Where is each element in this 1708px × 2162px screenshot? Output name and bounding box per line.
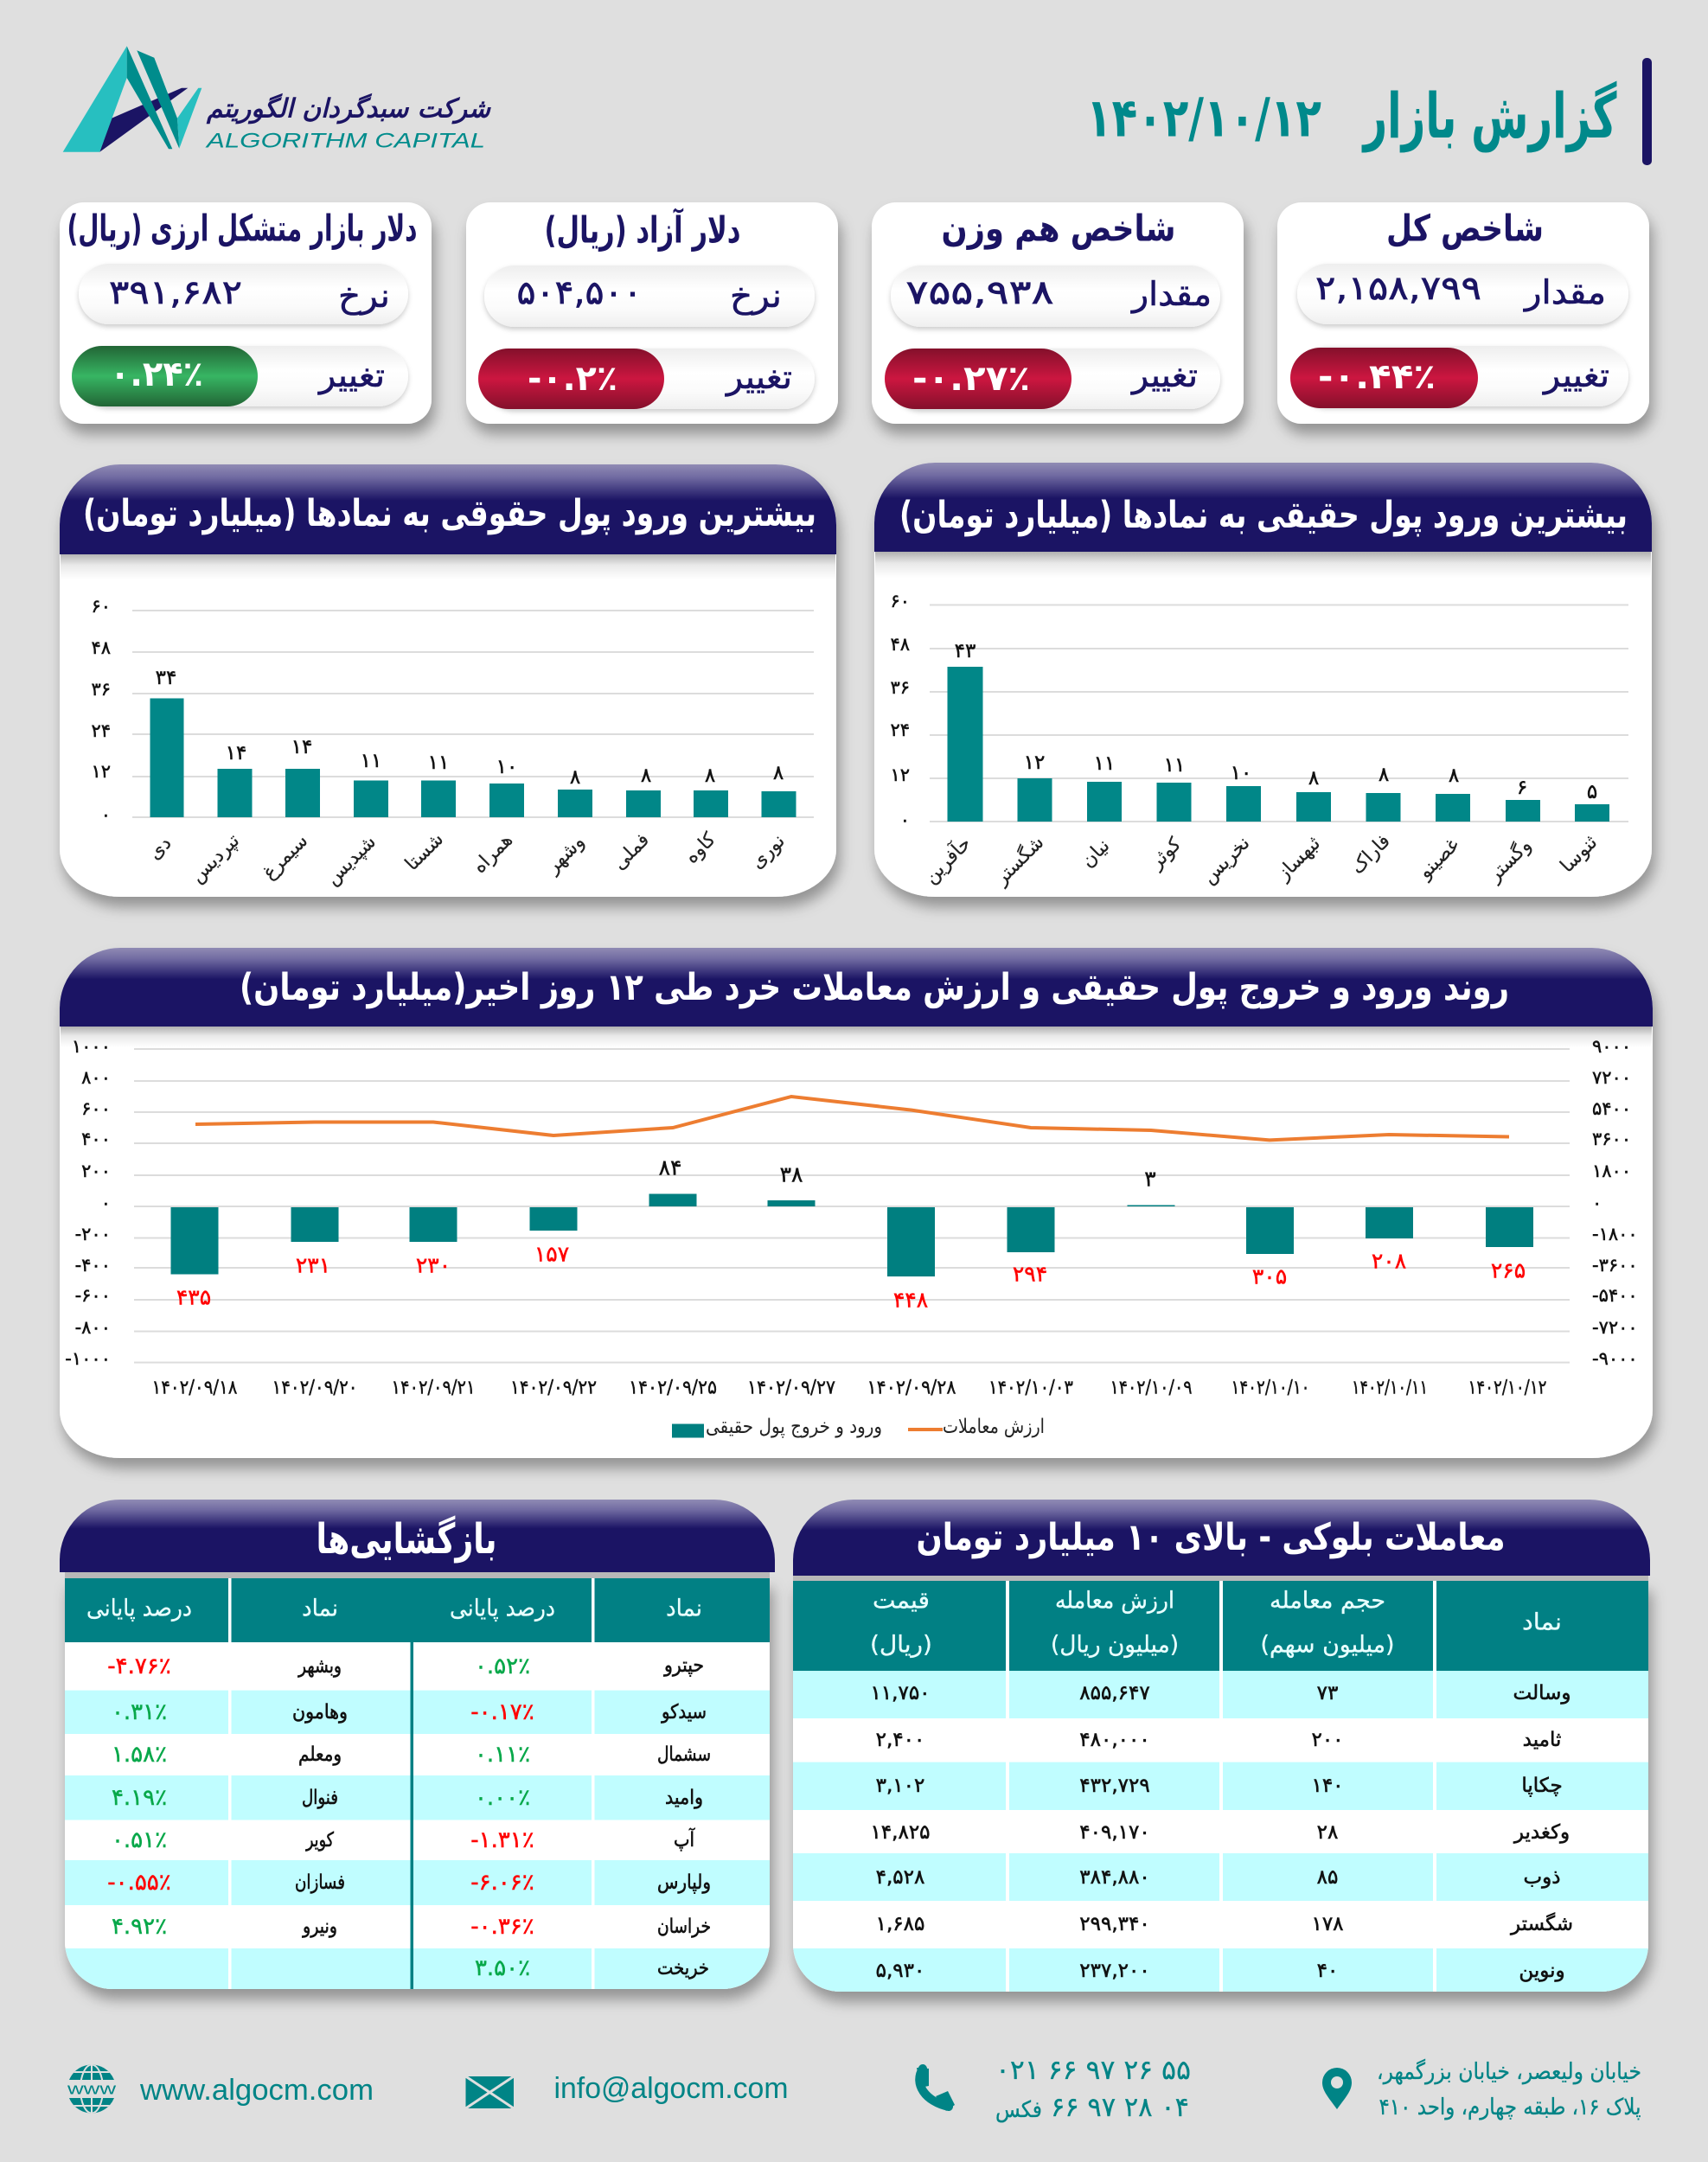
chart legend: ارزش معاملات	[943, 1416, 1045, 1438]
block trades table: ۴۰۹,۱۷۰	[1079, 1821, 1150, 1844]
combo chart: ۱۴۰۲/۰۹/۲۵	[629, 1377, 717, 1399]
block trades table: ذوب	[1523, 1866, 1561, 1889]
bar chart: ۱۲	[91, 761, 111, 782]
opening table: درصد پایانی	[450, 1595, 555, 1622]
bar chart: دی	[144, 833, 176, 864]
block trades table: ۱۱,۷۵۰	[870, 1682, 931, 1705]
card heading: دلار بازار متشکل ارزی (ریال)	[67, 208, 417, 249]
bar chart: ۶۰	[890, 591, 910, 611]
value label: نرخ	[730, 277, 782, 316]
value: ۲,۱۵۸,۷۹۹	[1315, 269, 1481, 307]
panel header	[60, 1500, 775, 1572]
change value: ۰.۲۴٪	[110, 355, 203, 394]
combo chart: ۲۰۸	[1372, 1249, 1406, 1273]
combo chart: -۳۶۰۰	[1592, 1255, 1638, 1276]
bar chart: شپدیس	[322, 831, 381, 890]
panel heading: روند ورود و خروج پول حقیقی و ارزش معاملات خرد طی ۱۲ روز اخیر(میلیارد تومان)	[240, 966, 1509, 1009]
block trades table: ۵,۹۳۰	[876, 1960, 924, 1982]
bar chart: نوری	[746, 830, 790, 873]
block trades table: شگستر	[1510, 1912, 1573, 1935]
change label: تغییر	[1130, 356, 1198, 395]
opening table: سیدکو	[661, 1701, 707, 1724]
value pill	[484, 265, 815, 327]
bar chart: ۸	[1308, 767, 1319, 790]
icon: envelope	[465, 2076, 514, 2108]
bar chart: ۶	[1517, 777, 1527, 799]
combo chart: ۱۴۰۲/۱۰/۰۹	[1110, 1377, 1192, 1399]
block trades table: (میلیون ریال)	[1051, 1631, 1179, 1659]
opening table: ۱.۵۸٪	[112, 1742, 167, 1768]
bar chart: حآفرین	[918, 831, 976, 888]
change badge	[1290, 348, 1478, 408]
bar chart: سیمرغ	[259, 830, 312, 884]
bar chart: تپردیس	[187, 830, 244, 887]
footer contact	[66, 2055, 1641, 2123]
block trades table: ۲۸	[1317, 1821, 1338, 1844]
block trades table: ۱,۶۸۵	[876, 1913, 924, 1935]
opening table: ۰.۵۲٪	[475, 1653, 530, 1679]
block trades table: ۱۷۸	[1311, 1913, 1344, 1935]
opening table: -۶.۰۶٪	[470, 1870, 534, 1896]
bar chart: ۳۶	[91, 679, 111, 700]
panel background	[60, 464, 836, 897]
combo chart: -۴۰۰	[75, 1255, 111, 1276]
opening table: ۰.۵۱٪	[112, 1827, 167, 1853]
address: خیابان ولیعصر، خیابان بزرگمهر،	[1377, 2058, 1641, 2085]
bar chart: شستا	[401, 828, 448, 875]
card heading: شاخص هم وزن	[941, 208, 1176, 251]
opening table: ۳.۵۰٪	[475, 1955, 530, 1981]
card heading: دلار آزاد (ریال)	[545, 208, 740, 251]
combo chart: -۷۲۰۰	[1592, 1317, 1638, 1338]
change pill	[1297, 346, 1628, 406]
icon: globe: www	[67, 2081, 117, 2098]
combo chart: ۸۴	[659, 1155, 681, 1180]
change label: تغییر	[1542, 356, 1609, 395]
bar chart: ۵	[1587, 781, 1597, 803]
change pill	[484, 349, 815, 409]
block trades table: ۳,۱۰۲	[876, 1775, 924, 1797]
bar chart: ۱۲	[1024, 752, 1045, 774]
bar chart: نخریس	[1199, 833, 1254, 888]
card background	[872, 202, 1244, 424]
bar chart: غصینو	[1414, 835, 1463, 884]
opening table: -۴.۷۶٪	[107, 1653, 171, 1679]
block trades table	[793, 1581, 1648, 1992]
phone number: ۰۲۱ ۶۶ ۹۷ ۲۶ ۵۵	[995, 2055, 1191, 2086]
combo chart: ۹۰۰۰	[1592, 1036, 1631, 1057]
block trades table: حجم معامله	[1270, 1588, 1385, 1614]
bar chart: ۱۱	[1164, 754, 1185, 777]
opening table: ۴.۹۲٪	[112, 1914, 167, 1940]
combo chart: ۱۴۰۲/۰۹/۱۸	[152, 1377, 238, 1399]
opening table: حپترو	[663, 1654, 704, 1677]
opening table: نماد	[302, 1595, 338, 1622]
bar chart: ۸	[705, 764, 715, 787]
bar chart: ثنوسا	[1557, 832, 1602, 877]
bar chart: ۸	[1379, 764, 1389, 786]
combo chart: ۸۰۰	[81, 1067, 111, 1088]
card: free dollar	[466, 202, 838, 424]
block trades table: ۱۴۰	[1311, 1775, 1344, 1797]
opening table: ونیرو	[302, 1916, 337, 1938]
bar chart: ۱۲	[890, 764, 910, 785]
fax number: ۶۶ ۹۷ ۲۸ ۰۴	[1051, 2092, 1189, 2123]
bar chart: شگستر	[989, 831, 1048, 890]
card: total index	[1277, 202, 1649, 424]
block trades table: ۷۳	[1317, 1682, 1338, 1705]
combo chart: ۱۵۷	[534, 1242, 569, 1266]
bar chart: ۸	[570, 766, 580, 789]
combo chart: ۳۸	[780, 1162, 803, 1187]
value pill	[891, 265, 1220, 327]
bar chart: ۱۱	[428, 752, 449, 774]
combo chart: ۱۴۰۲/۰۹/۲۸	[867, 1377, 956, 1399]
value: ۷۵۵,۹۳۸	[906, 273, 1053, 311]
bar chart: ۸	[1449, 764, 1459, 787]
panel heading: معاملات بلوکی - بالای ۱۰ میلیارد تومان	[917, 1516, 1505, 1559]
bar chart: ۳۶	[890, 677, 910, 698]
combo chart: -۵۴۰۰	[1592, 1285, 1638, 1306]
bar chart: ۱۱	[361, 750, 381, 772]
combo chart: -۱۰۰۰	[65, 1348, 111, 1369]
card heading: شاخص کل	[1386, 208, 1544, 251]
bar chart: کاوه	[681, 828, 720, 868]
combo chart: ۱۴۰۲/۰۹/۲۱	[391, 1377, 476, 1399]
combo chart: -۸۰۰	[75, 1317, 111, 1338]
bar chart: فملی	[609, 829, 654, 874]
header shadow	[875, 552, 1651, 578]
change value: -۰.۴۴٪	[1318, 357, 1436, 397]
combo chart: ۴۳۵	[176, 1285, 211, 1309]
block trades table: (میلیون سهم)	[1261, 1631, 1394, 1659]
combo chart: -۶۰۰	[75, 1285, 111, 1306]
bar chart: ۱۴	[291, 736, 312, 758]
bar chart: ۲۴	[91, 720, 111, 741]
combo chart: ۳	[1144, 1166, 1156, 1192]
block trades table: ۴۳۲,۷۲۹	[1079, 1775, 1150, 1797]
card background	[60, 202, 432, 424]
value label: مقدار	[1130, 275, 1212, 313]
address: پلاک ۱۶، طبقه چهارم، واحد ۴۱۰	[1379, 2095, 1641, 2120]
logo text persian: شرکت سبدگردان الگوریتم	[206, 93, 492, 125]
change pill	[79, 346, 408, 406]
address	[1377, 2058, 1641, 2120]
value: ۵۰۴,۵۰۰	[517, 273, 642, 311]
chart legend	[672, 1416, 1045, 1438]
card background	[466, 202, 838, 424]
combo chart: ۲۳۱	[296, 1252, 330, 1278]
combo chart: ۰	[101, 1193, 111, 1213]
bar chart: همراه	[469, 829, 517, 878]
opening table: ۰.۰۰٪	[475, 1785, 530, 1811]
table background	[65, 1578, 770, 1989]
block trades table: ۲۰۰	[1311, 1729, 1344, 1751]
opening table: نماد	[666, 1595, 702, 1622]
bar chart: ۶۰	[91, 596, 111, 617]
block trades table: چکاپا	[1521, 1775, 1563, 1797]
logo mark	[63, 46, 202, 152]
block trades table: ۴,۵۲۸	[876, 1866, 924, 1889]
bar chart: ۱۴	[226, 742, 246, 764]
combo chart	[65, 1036, 1638, 1399]
bar chart: ۰	[101, 804, 111, 825]
panel: opening trades table	[60, 1500, 775, 1989]
bar chart: ۲۴	[890, 720, 910, 740]
panel heading: بیشترین ورود پول حقوقی به نمادها (میلیارد تومان)	[83, 492, 816, 535]
combo chart: -۲۰۰	[75, 1224, 111, 1244]
bar chart: ۰	[900, 809, 910, 830]
panel: block trades table	[793, 1500, 1650, 1992]
block trades table: ۸۵۵,۶۴۷	[1079, 1682, 1150, 1705]
change badge	[885, 349, 1071, 409]
combo chart: ۳۶۰۰	[1592, 1129, 1631, 1149]
opening table: ولپارس	[657, 1871, 711, 1894]
combo chart: ۱۴۰۲/۰۹/۲۰	[272, 1377, 358, 1399]
combo chart: ۲۶۵	[1491, 1257, 1526, 1283]
panel: top real money inflow chart	[874, 463, 1652, 897]
bar chart	[91, 596, 814, 890]
block trades table: ثامید	[1523, 1729, 1561, 1751]
block trades table: وکغدیر	[1513, 1821, 1570, 1844]
panel heading: بازگشایی‌ها	[317, 1515, 496, 1564]
icon: phone	[917, 2068, 955, 2111]
opening table: فنوال	[302, 1787, 338, 1809]
chart legend: ورود و خروج پول حقیقی	[706, 1416, 882, 1438]
panel background	[60, 948, 1653, 1458]
bar chart: ۳۴	[156, 667, 176, 689]
combo chart: ۳۰۵	[1252, 1264, 1287, 1289]
change badge	[478, 349, 664, 409]
value pill	[1297, 264, 1628, 324]
bar chart: ۱۱	[1094, 752, 1115, 775]
block trades table: ۴۰	[1317, 1960, 1338, 1982]
combo chart: ۱۴۰۲/۱۰/۰۳	[988, 1377, 1073, 1399]
panel: top legal money inflow chart	[60, 464, 836, 897]
bar chart: ۱۰	[1231, 762, 1251, 784]
panel header	[874, 463, 1652, 552]
bar chart: ۴۸	[91, 637, 111, 658]
bar chart: ثبهساز	[1272, 833, 1325, 886]
opening table: -۱.۳۱٪	[470, 1827, 534, 1853]
combo chart: -۱۸۰۰	[1592, 1224, 1638, 1244]
opening table: ۰.۳۱٪	[112, 1699, 167, 1725]
value label: مقدار	[1523, 273, 1606, 311]
bar chart: ۴۸	[890, 634, 910, 655]
logo	[63, 46, 492, 152]
value pill	[79, 264, 408, 324]
bar chart: ۸	[641, 764, 651, 787]
opening table: ۴.۱۹٪	[112, 1785, 167, 1811]
logo text latin: ALGORITHM CAPITAL	[204, 130, 485, 152]
block trades table: ۸۵	[1317, 1866, 1338, 1889]
block trades table: (ریال)	[870, 1631, 932, 1659]
opening table: خریخت	[657, 1957, 709, 1980]
email: info@algocm.com	[553, 2072, 789, 2105]
opening table: -۰.۱۷٪	[470, 1699, 534, 1725]
value label: نرخ	[338, 277, 390, 316]
opening table: وامید	[665, 1787, 703, 1809]
block trades table: ۱۴,۸۲۵	[870, 1821, 931, 1844]
card background	[1277, 202, 1649, 424]
opening table: -۰.۵۵٪	[107, 1870, 171, 1896]
opening table: سشمال	[657, 1743, 711, 1766]
combo chart: ۴۴۸	[893, 1287, 928, 1313]
bar chart: نیان	[1078, 835, 1114, 872]
combo chart: -۹۰۰۰	[1592, 1348, 1638, 1369]
block trades table: قیمت	[873, 1588, 930, 1614]
icon: globe	[67, 2065, 116, 2114]
combo chart: ۱۴۰۲/۰۹/۲۷	[747, 1377, 835, 1399]
change value: -۰.۲٪	[528, 359, 617, 399]
block trades table: ۴۸۰,۰۰۰	[1079, 1729, 1150, 1751]
opening table: ومعلم	[298, 1743, 342, 1766]
combo chart: ۲۰۰	[81, 1161, 111, 1181]
bar chart: وگستر	[1483, 834, 1536, 887]
bar chart	[890, 591, 1628, 890]
combo chart: ۱۴۰۲/۱۰/۱۱	[1352, 1377, 1428, 1399]
website: www.algocm.com	[139, 2074, 374, 2107]
combo chart: ۱۸۰۰	[1592, 1161, 1631, 1181]
bar chart: ۸	[773, 762, 784, 784]
icon: location pin	[1322, 2068, 1352, 2109]
block trades table: ۳۸۴,۸۸۰	[1079, 1866, 1150, 1889]
combo chart: ۱۴۰۲/۱۰/۱۲	[1468, 1377, 1546, 1399]
opening table: کویر	[305, 1829, 334, 1852]
change badge	[72, 346, 258, 406]
opening table: ۰.۱۱٪	[475, 1742, 530, 1768]
table background	[793, 1581, 1648, 1992]
header underline	[65, 1572, 770, 1578]
opening table	[65, 1578, 770, 1989]
block trades table: ۲,۴۰۰	[876, 1729, 924, 1751]
panel header	[60, 948, 1653, 1027]
combo chart: ۱۴۰۲/۰۹/۲۲	[510, 1377, 597, 1399]
opening table: وبشهر	[297, 1655, 342, 1678]
opening table: -۰.۳۶٪	[470, 1914, 534, 1940]
header underline	[793, 1576, 1648, 1581]
opening table: خراسان	[657, 1916, 711, 1938]
card: equal weight index	[872, 202, 1244, 424]
combo chart: ۷۲۰۰	[1592, 1067, 1631, 1088]
opening table: فسازان	[295, 1871, 345, 1894]
change value: -۰.۲۷٪	[912, 359, 1030, 399]
change pill	[891, 349, 1220, 409]
change label: تغییر	[317, 356, 385, 395]
opening table: درصد پایانی	[86, 1595, 192, 1622]
block trades table: ۲۳۷,۲۰۰	[1079, 1960, 1150, 1982]
card: exchange dollar	[60, 202, 432, 424]
combo chart: ۵۴۰۰	[1592, 1098, 1631, 1119]
combo chart: ۰	[1592, 1193, 1602, 1213]
panel background	[874, 463, 1652, 897]
combo chart: ۴۰۰	[81, 1129, 111, 1149]
combo chart: ۱۴۰۲/۱۰/۱۰	[1231, 1377, 1309, 1399]
block trades table: ارزش معامله	[1055, 1588, 1174, 1614]
block trades table: ۲۹۹,۳۴۰	[1079, 1913, 1150, 1935]
opening table: وهامون	[292, 1701, 348, 1724]
combo chart: ۱۰۰۰	[72, 1036, 111, 1057]
fax number: فکس	[995, 2097, 1042, 2123]
block trades table: نماد	[1522, 1609, 1562, 1636]
change label: تغییر	[725, 358, 792, 397]
bar chart: ۴۳	[955, 640, 976, 662]
combo chart: ۲۹۴	[1013, 1261, 1047, 1287]
panel header	[60, 464, 836, 554]
block trades table: وسالت	[1513, 1682, 1570, 1705]
opening table: آپ	[674, 1827, 695, 1852]
bar chart: کوثر	[1145, 834, 1186, 874]
header shadow	[61, 1027, 1652, 1047]
header accent bar	[1642, 58, 1652, 165]
bar chart: فاراک	[1347, 830, 1395, 879]
bar chart: ۱۰	[496, 756, 517, 778]
report date: ۱۴۰۲/۱۰/۱۲	[1086, 86, 1321, 149]
block trades table: ونوین	[1519, 1960, 1565, 1982]
value: ۳۹۱,۶۸۲	[109, 273, 242, 311]
panel header	[793, 1500, 1650, 1576]
combo chart: ۲۳۰	[416, 1252, 451, 1278]
header shadow	[61, 553, 835, 579]
panel: 12 day real money trend chart	[60, 948, 1653, 1458]
combo chart: ۶۰۰	[81, 1098, 111, 1119]
bar chart: وشهر	[541, 831, 589, 879]
